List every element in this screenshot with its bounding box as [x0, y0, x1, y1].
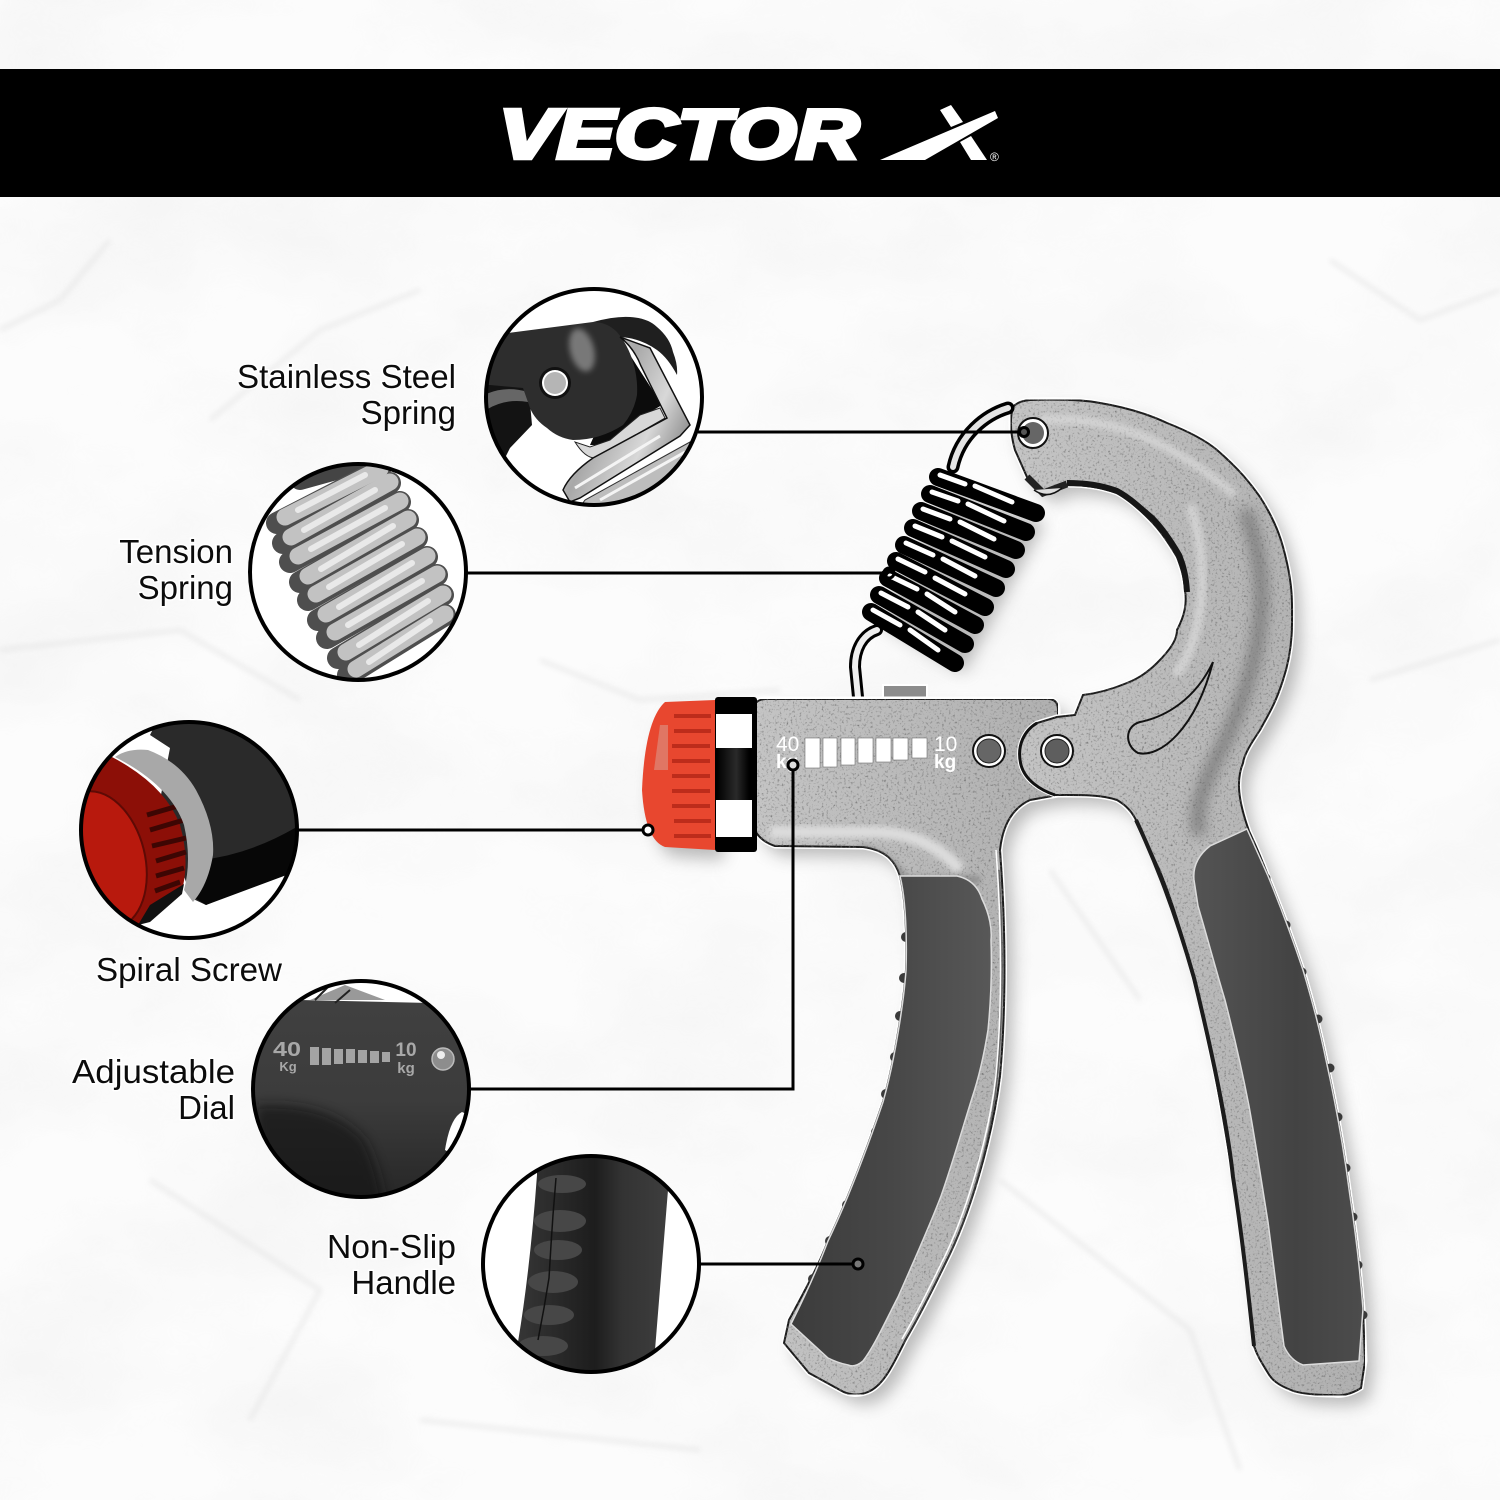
weight scale 40 to 10 kg: 40	[776, 733, 799, 756]
label: Non-Slip Handle: Handle	[351, 1264, 456, 1301]
chrome collar	[715, 697, 757, 852]
gripper shadow	[651, 410, 1374, 1405]
pivot holes	[973, 418, 1073, 795]
label: Non-Slip Handle	[327, 1228, 456, 1301]
steel spring coil	[871, 408, 1036, 663]
bottom spring hook	[855, 630, 927, 699]
label: Adjustable Dial: Adjustable	[72, 1053, 235, 1090]
label: Stainless Steel Spring	[237, 358, 456, 431]
label: Tension Spring	[119, 533, 233, 606]
right arm and hook head	[1011, 400, 1365, 1395]
hand gripper product	[642, 400, 1368, 1395]
label: Adjustable Dial: Dial	[178, 1089, 235, 1126]
callout circle: adjustable dial: 40	[273, 1039, 301, 1061]
callout circle: adjustable dial: Kg	[279, 1059, 297, 1074]
weight scale 40 to 10 kg: 10	[934, 733, 957, 756]
label: Stainless Steel Spring: Stainless Steel	[237, 358, 456, 395]
weight scale 40 to 10 kg	[776, 733, 957, 773]
label: Adjustable Dial	[72, 1053, 235, 1126]
header band	[0, 69, 1500, 197]
label: Stainless Steel Spring: Spring	[361, 394, 456, 431]
weight scale 40 to 10 kg: kg	[934, 752, 956, 773]
connector end dots	[643, 428, 1028, 1269]
teardrop emboss	[1128, 662, 1213, 754]
callout circle: non-slip handle	[483, 1150, 699, 1380]
callout connector lines	[298, 432, 1020, 1264]
callout circle: stainless steel spring	[478, 289, 702, 512]
callout circle: adjustable dial	[250, 981, 480, 1210]
weight scale 40 to 10 kg: kg	[776, 752, 798, 773]
callout circle: adjustable dial: kg	[397, 1060, 415, 1077]
right rubber grip	[1194, 829, 1368, 1365]
red dial	[642, 700, 715, 850]
callout circle: adjustable dial: 10	[395, 1040, 417, 1061]
label: Tension Spring: Spring	[138, 569, 233, 606]
logo wordmark VECTOR: VECTOR	[499, 95, 860, 173]
callout circle: tension spring	[250, 455, 466, 680]
callout circle: spiral screw	[79, 720, 299, 940]
left rubber grip	[791, 876, 991, 1366]
label: Non-Slip Handle: Non-Slip	[327, 1228, 456, 1265]
hook inner dark edge	[1067, 483, 1187, 592]
logo mark X	[880, 105, 999, 164]
barrel and left arm	[753, 699, 1058, 1394]
logo mark X: ®	[990, 150, 999, 164]
label: Tension Spring: Tension	[119, 533, 233, 570]
label: Spiral Screw: Spiral Screw	[96, 951, 282, 988]
